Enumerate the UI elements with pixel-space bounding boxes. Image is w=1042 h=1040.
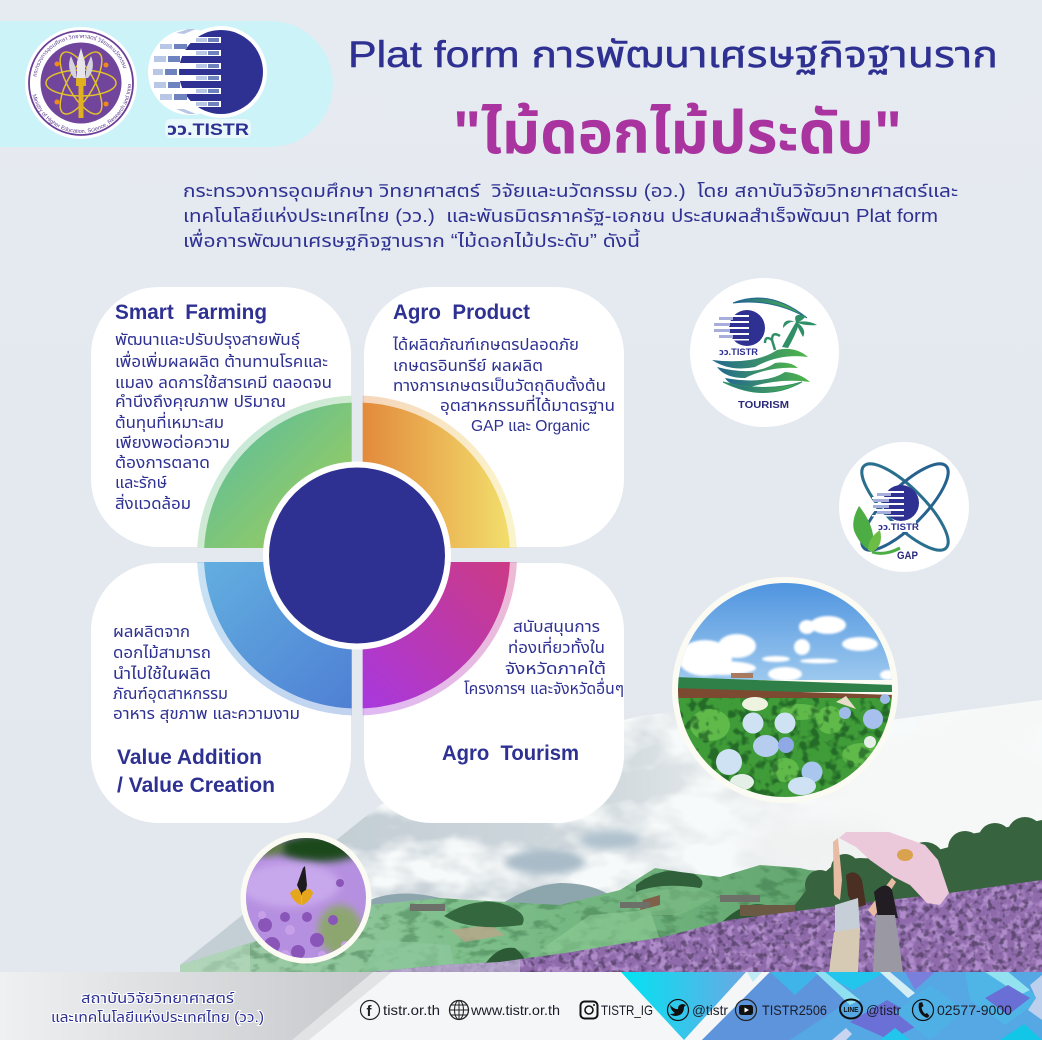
text: agro tourism: สนับสนุนการ [513,619,600,636]
contact: facebook: tistr.or.th [383,1002,440,1018]
icon: tourism logo [690,278,839,427]
text: agro product: อุตสาหกรรมที่ได้มาตรฐาน [440,394,615,415]
contact: line: @tistr [866,1002,901,1018]
segment: green [197,396,352,548]
footer pattern: blue diamonds [621,972,1042,1040]
footer [0,972,1042,1040]
icon: GAP logo: วว.TISTR [878,522,920,532]
contact: youtube [736,1000,827,1020]
text: agro product: ทางการเกษตรเป็นวัตถุดิบตั้งต้น [393,375,606,395]
footer organization name [51,991,264,1026]
panel: smart farming card [91,287,351,547]
segment: magenta [362,562,517,716]
contact: twitter [668,1000,728,1020]
contact: instagram: TISTR_IG [601,1002,653,1018]
text: agro product [392,301,615,435]
panel: agro product card [364,287,624,547]
text: value addition [113,624,300,797]
icon: GAP logo: GAP [897,550,918,562]
text: smart farming: ต้องการตลาด [115,455,210,472]
logo: TISTR: วว.TISTR [167,120,249,139]
text: smart farming: แมลง ลดการใช้สารเคมี ตลอดจน [115,375,332,392]
footer organization name: และเทคโนโลยีแห่งประเทศไทย (วว.) [51,1009,264,1026]
panel: agro tourism card [364,563,624,823]
text: smart farming: คำนึงถึงคุณภาพ ปริมาณ [115,394,286,411]
logo: TISTR [148,26,267,139]
contact: website [450,1000,560,1020]
text: smart farming [115,301,332,513]
panel: value addition card [91,563,351,823]
text: agro product: GAP และ Organic [471,418,590,435]
text: smart farming: ต้นทุนที่เหมาะสม [115,411,224,432]
contact: line: LINE [844,1007,859,1014]
text: value addition: ผลผลิตจาก [113,624,190,641]
contact: facebook: f [366,1003,372,1020]
contact: facebook [360,1000,440,1020]
icon: tourism logo: TOURISM [738,399,789,411]
text: smart farming: เพียงพอต่อความ [115,434,230,452]
text: value addition: ดอกไม้สามารถ [113,645,211,662]
intro paragraph: เพื่อการพัฒนาเศรษฐกิจฐานราก “ไม้ดอกไม้ประดับ” ดังนี้ [183,228,640,251]
background photo: mountain and verbena field [180,690,1042,975]
text: smart farming: สิ่งแวดล้อม [115,493,191,513]
icon: tourism logo: วว.TISTR [719,347,759,357]
logo: ministry seal [25,27,137,139]
text: smart farming: และรักษ์ [115,475,167,492]
text: smart farming: เพื่อเพิ่มผลผลิต ต้านทานโรคและ [115,350,328,371]
text: agro product: Agro Product [393,301,530,324]
contact: instagram [580,1002,653,1018]
contact: website: www.tistr.or.th [470,1002,560,1018]
text: smart farming: Smart Farming [115,301,267,324]
intro paragraph: กระทรวงการอุดมศึกษา วิทยาศาสตร์ วิจัยและนวัตกรรม (อว.) โดย สถาบันวิจัยวิทยาศาสตร์และ [183,181,958,202]
text: smart farming: พัฒนาและปรับปรุงสายพันธุ์ [115,332,300,349]
text: agro tourism [442,619,624,765]
text: agro tourism: ท่องเที่ยวทั้งใน [508,636,605,657]
text: value addition: ภัณฑ์อุตสาหกรรม [113,686,228,703]
contact: phone: 02577-9000 [937,1002,1012,1018]
photo: butterfly on verbena [240,832,372,965]
header band [0,21,333,147]
icon: GAP logo [839,442,969,572]
text: agro product: เกษตรอินทรีย์ ผลผลิต [393,358,543,375]
segment: orange [362,396,517,548]
photo: hydrangea field [672,577,898,803]
text: agro product: ได้ผลิตภัณฑ์เกษตรปลอดภัย [392,337,579,354]
contact: twitter: @tistr [692,1002,728,1018]
text: value addition: อาหาร สุขภาพ และความงาม [113,706,300,723]
center circle [269,468,445,644]
intro paragraph [183,181,958,251]
contact: phone [912,1000,1012,1020]
segment: blue [197,562,352,716]
text: agro tourism: Agro Tourism [442,742,579,765]
title: "ไม้ดอกไม้ประดับ" [453,99,902,166]
woman with scarf [829,832,949,972]
contact: line [840,1000,901,1018]
logo: ministry seal: กระทรวงการอุดมศึกษา วิทยาศาสตร์ วิจัยและนวัตกรรม [34,34,126,77]
text: agro tourism: โครงการฯ และจังหวัดอื่นๆ [464,677,624,698]
diagram: four-segment wheel [197,396,517,716]
title [348,34,998,166]
title: Plat form การพัฒนาเศรษฐกิจฐานราก [348,34,998,75]
contact: youtube: TISTR2506 [762,1002,827,1018]
verbena flower texture [370,880,1042,972]
text: value addition: Value Addition [117,746,262,769]
footer organization name: สถาบันวิจัยวิทยาศาสตร์ [81,991,235,1007]
text: agro tourism: จังหวัดภาคใต้ [505,661,606,678]
text: value addition: นำไปใช้ในผลิต [113,666,211,683]
intro paragraph: เทคโนโลยีแห่งประเทศไทย (วว.) และพันธมิตรภาครัฐ-เอกชน ประสบผลสำเร็จพัฒนา Plat form [183,206,938,226]
text: value addition: / Value Creation [117,774,275,797]
